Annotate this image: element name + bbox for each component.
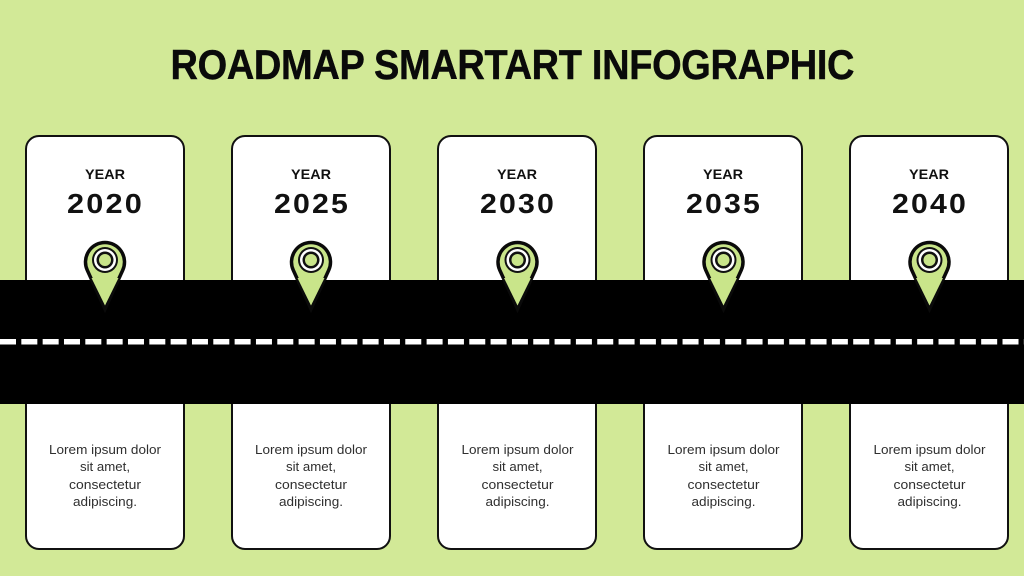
description: consectetur bbox=[69, 477, 142, 492]
description bbox=[874, 442, 986, 509]
description: adipiscing. bbox=[898, 494, 962, 509]
label: 2040: 2040 bbox=[892, 188, 968, 219]
description bbox=[462, 442, 574, 509]
description: adipiscing. bbox=[73, 494, 137, 509]
description bbox=[49, 442, 162, 509]
description: Lorem ipsum dolor bbox=[668, 442, 780, 457]
panel: year 2035 bbox=[644, 136, 802, 549]
description: adipiscing. bbox=[486, 494, 550, 509]
panel: year 2030 bbox=[438, 136, 596, 549]
description: consectetur bbox=[275, 477, 348, 492]
icon: map pin 2040 bbox=[910, 243, 949, 309]
description: sit amet, bbox=[698, 459, 748, 474]
label: 2030: 2030 bbox=[480, 188, 556, 219]
description: consectetur bbox=[894, 477, 966, 492]
description bbox=[255, 442, 368, 509]
description: sit amet, bbox=[80, 459, 130, 474]
road centre dashes bbox=[0, 339, 1024, 344]
label: year: YEAR bbox=[909, 166, 949, 182]
description: Lorem ipsum dolor bbox=[874, 442, 986, 457]
description: Lorem ipsum dolor bbox=[462, 442, 574, 457]
title: ROADMAP SMARTART INFOGRAPHIC bbox=[170, 42, 854, 88]
label: year: YEAR bbox=[85, 166, 125, 182]
description: consectetur bbox=[688, 477, 760, 492]
icon: map pin 2030 bbox=[498, 243, 537, 309]
label: year: YEAR bbox=[497, 166, 537, 182]
description: sit amet, bbox=[492, 459, 542, 474]
description: consectetur bbox=[482, 477, 554, 492]
road bbox=[0, 280, 1024, 404]
panel: year 2040 bbox=[850, 136, 1008, 549]
description: adipiscing. bbox=[692, 494, 756, 509]
description: adipiscing. bbox=[279, 494, 343, 509]
description: sit amet, bbox=[286, 459, 336, 474]
icon: map pin 2020 bbox=[86, 243, 124, 309]
description bbox=[668, 442, 780, 509]
label: 2025: 2025 bbox=[274, 188, 350, 219]
description: Lorem ipsum dolor bbox=[49, 442, 162, 457]
label: 2035: 2035 bbox=[686, 188, 762, 219]
icon: map pin 2035 bbox=[704, 243, 743, 309]
label: year: YEAR bbox=[291, 166, 331, 182]
panel: year 2020 bbox=[26, 136, 184, 549]
icon: map pin 2025 bbox=[292, 243, 330, 309]
label: year: YEAR bbox=[703, 166, 743, 182]
description: sit amet, bbox=[904, 459, 954, 474]
description: Lorem ipsum dolor bbox=[255, 442, 368, 457]
panel: year 2025 bbox=[232, 136, 390, 549]
label: 2020: 2020 bbox=[67, 188, 144, 219]
